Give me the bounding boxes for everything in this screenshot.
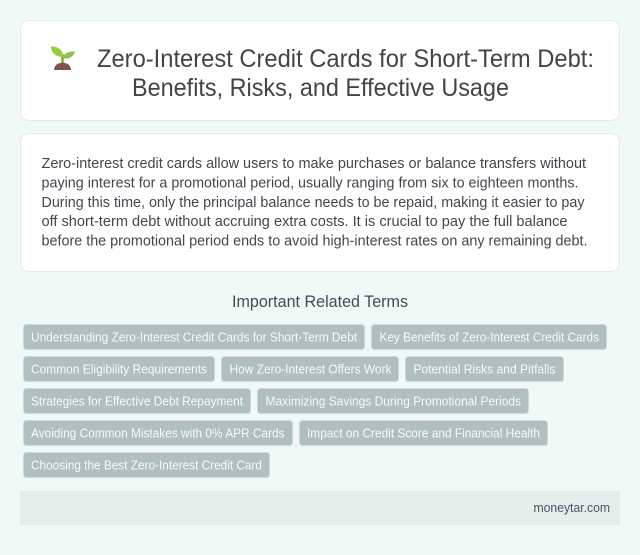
description text: paying interest for a promotional period, usually ranging from six to eighteen months. — [42, 174, 578, 192]
footer — [20, 491, 620, 525]
tag: Potential Risks and Pitfalls — [414, 362, 556, 376]
tag: How Zero-Interest Offers Work — [230, 362, 392, 376]
icon: seedling — [51, 46, 75, 70]
tag — [258, 388, 528, 414]
tag — [24, 324, 364, 350]
footer: moneytar.com — [534, 501, 610, 515]
description text: off short-term debt without accruing extra costs. It is crucial to pay the full balance — [42, 213, 568, 230]
description text — [42, 155, 588, 250]
tag — [24, 356, 214, 382]
tag: Common Eligibility Requirements — [31, 362, 207, 376]
tag — [24, 388, 250, 414]
tag — [24, 420, 292, 446]
tag list — [24, 324, 606, 478]
tag: Avoiding Common Mistakes with 0% APR Cards — [31, 426, 284, 440]
tag — [222, 356, 398, 382]
description text: Zero-interest credit cards allow users to make purchases or balance transfers without — [42, 155, 587, 172]
tag: Impact on Credit Score and Financial Health — [307, 426, 540, 440]
title text — [97, 45, 594, 102]
tag: Choosing the Best Zero-Interest Credit Card — [31, 458, 262, 472]
description text: During this time, only the principal balance needs to be repaid, making it easier to pay — [42, 194, 585, 211]
panel: title — [20, 20, 620, 120]
title text: Benefits, Risks, and Effective Usage — [132, 74, 509, 102]
tag: Understanding Zero-Interest Credit Cards for Short-Term Debt — [31, 330, 357, 344]
tag: Strategies for Effective Debt Repayment — [31, 394, 243, 408]
tag: Maximizing Savings During Promotional Periods — [266, 394, 521, 408]
tag: Key Benefits of Zero-Interest Credit Cards — [380, 330, 599, 344]
tag — [24, 452, 270, 478]
title text: Zero-Interest Credit Cards for Short-Term Debt: — [97, 45, 594, 73]
tag — [406, 356, 564, 382]
tag — [300, 420, 548, 446]
tag — [372, 324, 606, 350]
panel: description — [20, 134, 620, 272]
heading: related terms: Important Related Terms — [232, 293, 408, 311]
description text: before the promotional period ends to avoid high-interest rates on any remaining debt. — [42, 232, 588, 250]
